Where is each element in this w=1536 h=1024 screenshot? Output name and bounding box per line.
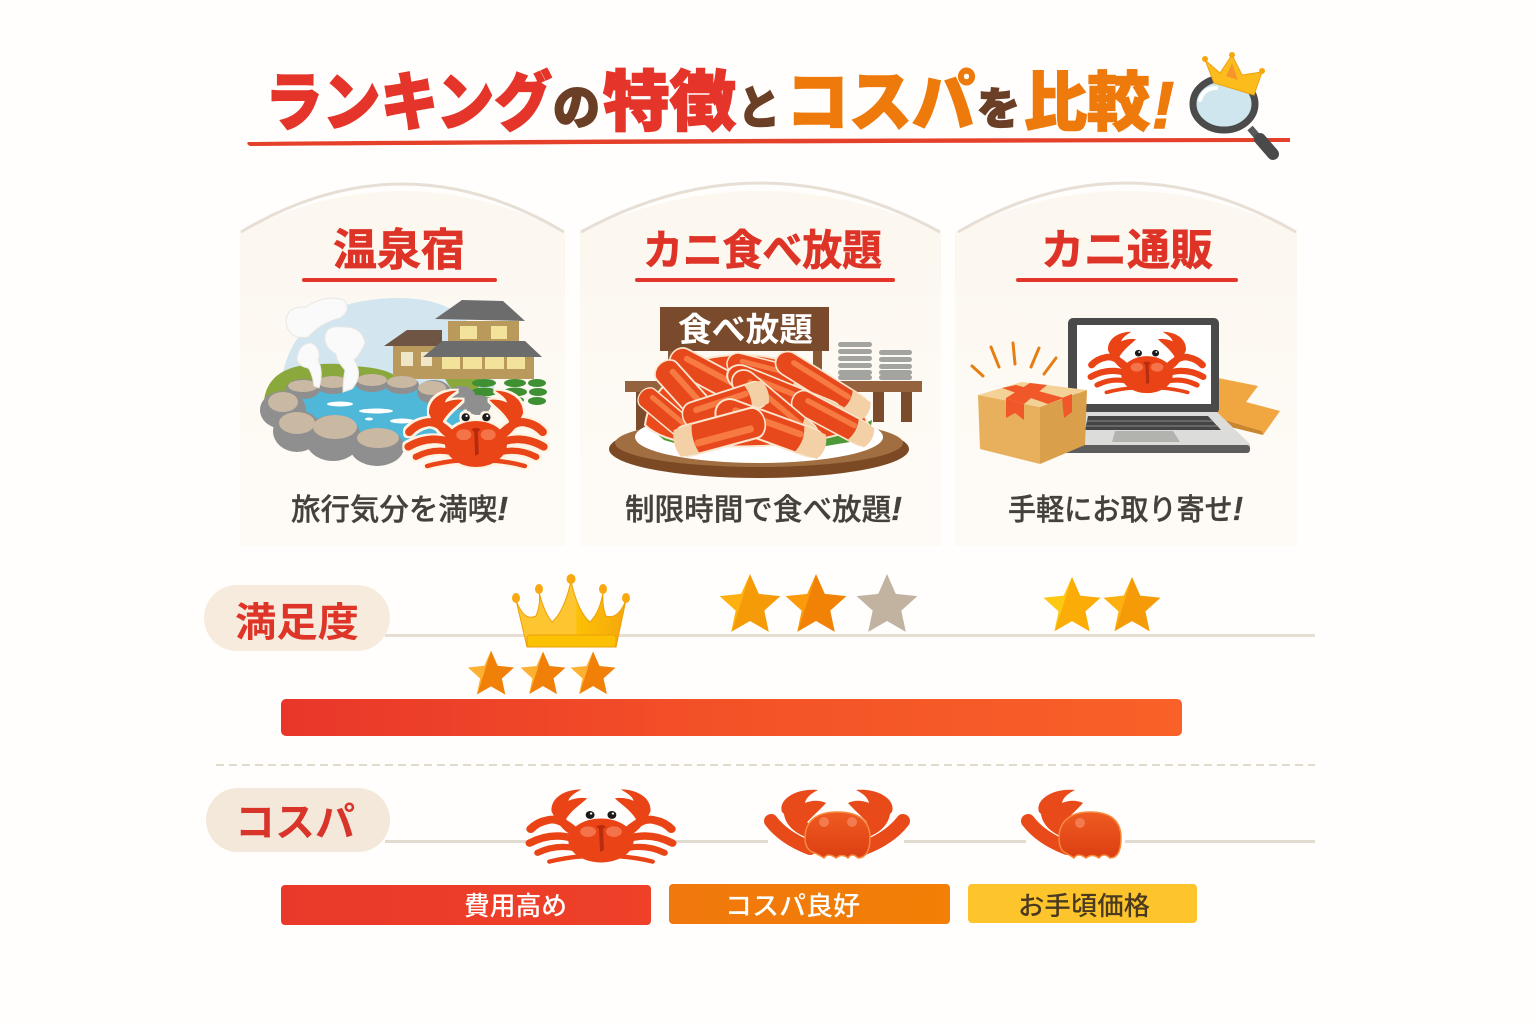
label pill	[206, 788, 390, 852]
label text: 満足度	[235, 601, 359, 645]
stars: all you can eat	[720, 574, 917, 632]
caption: 制限時間で食べ放題!	[625, 490, 902, 527]
caption: 手軽にお取り寄せ!	[1008, 490, 1243, 527]
icon: crab back view	[771, 790, 903, 858]
illustration: hot spring inn	[260, 298, 547, 466]
bar: good value: コスパ良好	[725, 891, 860, 921]
caption: 旅行気分を満喫!	[291, 490, 508, 527]
row: cost performance	[206, 788, 1315, 925]
stars: onsen small	[468, 651, 615, 695]
panel arc	[581, 183, 940, 232]
bar: affordable: お手頃価格	[1018, 891, 1150, 921]
bar: high cost: 費用高め	[464, 891, 567, 921]
heading: カニ通販	[1041, 227, 1213, 275]
title: cospa: コスパ	[786, 65, 975, 139]
panel background	[240, 191, 565, 546]
title: wo: を	[977, 85, 1020, 134]
row: satisfaction	[204, 574, 1315, 736]
title: exclamation: !	[1152, 68, 1174, 142]
icon: crown	[512, 574, 630, 647]
bar: good value	[669, 884, 950, 924]
title: ranking: ランキング	[265, 67, 552, 139]
label pill	[204, 585, 390, 651]
icon: crab full	[530, 789, 672, 862]
illustration: sign, table and crab platter	[609, 307, 922, 478]
bar: affordable	[968, 884, 1197, 923]
icon: crab	[408, 391, 544, 467]
panel: mail order	[955, 183, 1297, 546]
stars: mail order	[1043, 577, 1161, 631]
heading underline	[302, 278, 497, 282]
title: no: の	[553, 82, 600, 135]
illustration: laptop and parcel	[972, 318, 1280, 464]
title	[265, 65, 1174, 142]
panel: onsen	[240, 184, 565, 546]
panel: all you can eat	[580, 183, 941, 546]
panel background	[955, 191, 1297, 546]
row line segments	[385, 840, 1315, 843]
dashed separator	[216, 764, 1315, 766]
icon: crab half view	[1028, 790, 1121, 858]
title: tokucho: 特徴	[603, 65, 736, 139]
label text: コスパ	[235, 801, 355, 845]
bar: high cost	[281, 885, 651, 925]
panel arc	[958, 183, 1296, 232]
heading underline	[1016, 278, 1238, 282]
sign text: 食べ放題	[678, 311, 813, 348]
heading underline	[635, 278, 895, 282]
heading: カニ食べ放題	[643, 227, 882, 274]
icon: crab on screen	[1091, 332, 1203, 393]
title: to: と	[738, 82, 780, 134]
row line	[385, 634, 1315, 637]
satisfaction bar	[281, 699, 1182, 736]
title: hikaku: 比較	[1024, 67, 1150, 139]
heading: 温泉宿	[333, 226, 465, 275]
panel background	[580, 191, 941, 546]
panel arc	[241, 184, 564, 232]
icon: magnifier with crown	[1193, 52, 1273, 154]
title underline	[247, 138, 1290, 146]
